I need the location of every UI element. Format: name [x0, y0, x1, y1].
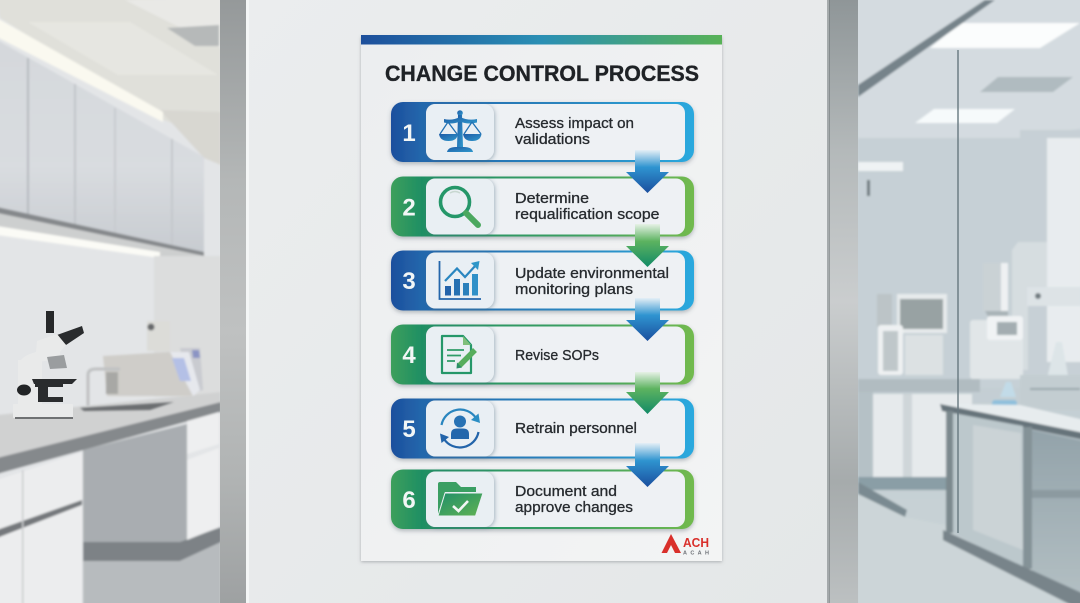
step 1 label: validations — [515, 132, 590, 148]
step 1 — [391, 102, 694, 162]
step 1 label — [515, 116, 634, 148]
step 4 content panel — [426, 326, 685, 382]
step 3 band — [391, 250, 694, 310]
step 1 number: 1 — [402, 120, 416, 147]
step 2 band — [391, 176, 694, 236]
step 4 band — [391, 324, 694, 384]
step 6 — [391, 470, 694, 529]
step 3 icon tile — [426, 252, 494, 308]
poster — [361, 35, 722, 561]
logo triangle mark — [662, 534, 681, 553]
step 2 content panel — [426, 178, 685, 234]
arrow: step 4 to 5 — [626, 372, 669, 414]
arrow: step 2 to 3 — [626, 224, 669, 267]
arrow: step 3 to 4 — [626, 298, 669, 341]
step 5 — [391, 398, 694, 458]
step 2 label: Determine — [515, 191, 589, 207]
poster sheet — [361, 36, 722, 561]
microscope — [13, 311, 84, 419]
left laboratory scene — [0, 0, 221, 603]
arrow: step 1 to 2 — [626, 150, 669, 193]
title: CHANGE CONTROL PROCESS — [385, 61, 699, 86]
step 3 content panel — [426, 252, 685, 308]
step 3 label: monitoring plans — [515, 282, 633, 298]
logo — [662, 534, 709, 556]
step 6 icon tile — [426, 472, 494, 527]
step 6 content panel — [426, 472, 685, 527]
step 5 content panel — [426, 400, 685, 456]
step 3 label: Update environmental — [515, 266, 669, 282]
icon: balance scale — [439, 110, 482, 152]
step 3 label — [515, 266, 669, 298]
icon: magnifying glass — [440, 188, 478, 225]
icon: document with pencil — [442, 336, 475, 373]
icon: folder with check mark — [438, 482, 483, 516]
logo sub-mark: ACAH — [683, 550, 709, 556]
step 6 label: Document and — [515, 484, 617, 500]
step 2 label: requalification scope — [515, 207, 660, 223]
step 3 number: 3 — [402, 268, 416, 295]
step 4 — [391, 324, 694, 384]
step 3 — [391, 250, 694, 310]
step 4 label: Revise SOPs — [515, 348, 599, 364]
step 5 label: Retrain personnel — [515, 421, 637, 437]
step 5 icon tile — [426, 400, 494, 456]
right laboratory scene — [856, 0, 1080, 603]
step 1 band — [391, 102, 694, 162]
step 5 number: 5 — [402, 416, 416, 443]
step 1 content panel — [426, 104, 685, 160]
step 2 — [391, 176, 694, 236]
step 6 number: 6 — [402, 487, 416, 514]
step 2 icon tile — [426, 178, 494, 234]
arrow: step 5 to 6 — [626, 443, 669, 487]
logo wordmark: ACH — [683, 536, 709, 550]
step 6 band — [391, 470, 694, 529]
step 1 icon tile — [426, 104, 494, 160]
laboratory instrument and faucet — [80, 321, 203, 411]
step 6 label: approve changes — [515, 500, 633, 516]
icon: rising bar chart — [440, 261, 481, 299]
step 4 number: 4 — [402, 342, 416, 369]
step 4 icon tile — [426, 326, 494, 382]
step 2 number: 2 — [402, 194, 416, 222]
right door frame — [827, 0, 858, 603]
left door frame — [220, 0, 249, 603]
step 2 label — [515, 191, 660, 223]
step 5 band — [391, 398, 694, 458]
top colour bar — [361, 35, 722, 44]
step 1 label: Assess impact on — [515, 116, 634, 132]
step 6 label — [515, 484, 633, 516]
icon: person with rotating arrows — [440, 410, 480, 447]
glass mullion — [957, 50, 959, 533]
wall — [247, 0, 830, 603]
